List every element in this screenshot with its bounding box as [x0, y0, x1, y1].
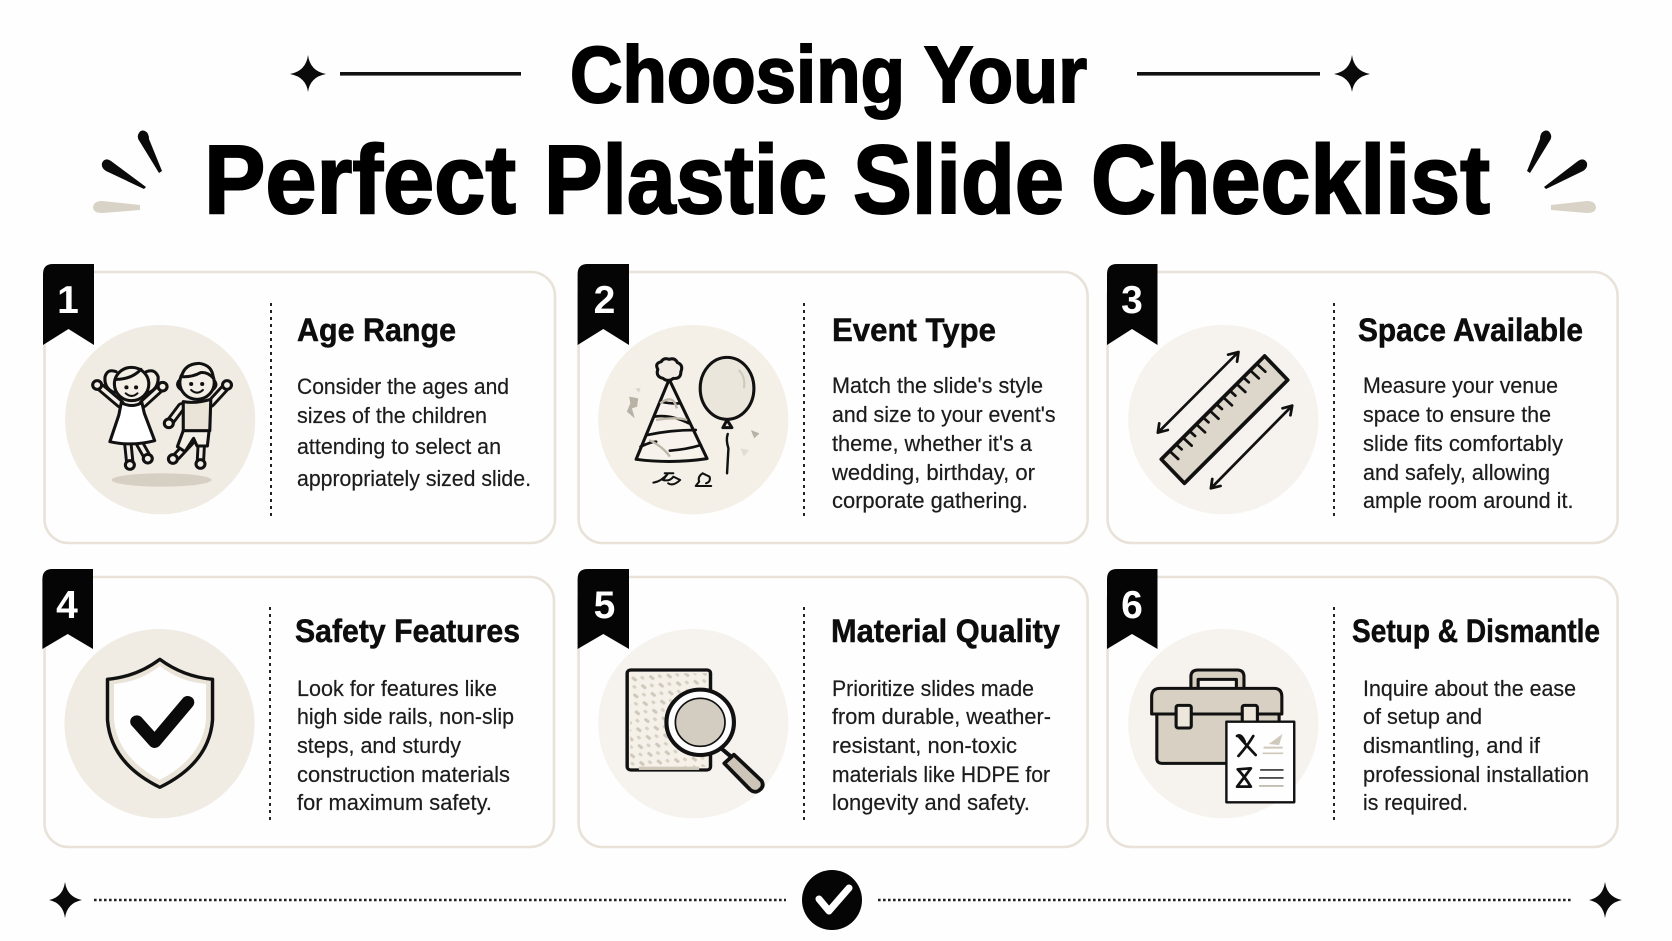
body text: Look for features like	[297, 676, 497, 701]
panel: material quality	[578, 569, 1088, 847]
footer divider	[49, 870, 1622, 930]
body text: longevity and safety.	[832, 790, 1030, 815]
panel: space available	[1107, 264, 1618, 543]
panel: safety features	[42, 569, 554, 847]
body text: construction materials	[297, 762, 510, 787]
footer star: left	[49, 882, 82, 918]
body text: Inquire about the ease	[1363, 676, 1576, 701]
ribbon number 6	[1107, 569, 1158, 649]
body text	[297, 374, 531, 491]
body text: space to ensure the	[1363, 402, 1551, 427]
body text: theme, whether it's a	[832, 431, 1032, 456]
body text: is required.	[1363, 790, 1468, 815]
ribbon number 2	[578, 264, 629, 345]
body text	[831, 373, 1056, 513]
sparks: right	[1527, 130, 1596, 213]
heading: material quality: Material Quality	[831, 613, 1060, 649]
ribbon number 5	[578, 569, 629, 649]
body text: slide fits comfortably	[1363, 431, 1564, 456]
body text: materials like HDPE for	[832, 762, 1050, 787]
body text: Match the slide's style	[832, 373, 1043, 398]
ribbon number 1: 1	[57, 279, 79, 322]
heading line 2	[204, 125, 1490, 234]
heading: safety features: Safety Features	[295, 613, 520, 649]
heading line 2: Slide	[853, 125, 1064, 234]
heading: event type: Event Type	[832, 312, 996, 348]
panel: event type	[578, 264, 1088, 543]
icon circle with party hat and balloon	[598, 325, 788, 514]
body text: for maximum safety.	[297, 790, 492, 815]
ribbon number 2: 2	[594, 279, 615, 322]
sparks: left	[93, 130, 162, 213]
ribbon number 4: 4	[56, 584, 78, 627]
icon circle with toolbox and checklist	[1128, 629, 1318, 818]
body text	[1363, 676, 1589, 815]
body text: appropriately sized slide.	[297, 466, 531, 491]
body text: and size to your event's	[832, 402, 1056, 427]
ribbon number 5: 5	[594, 584, 615, 627]
icon circle with ruler and arrows	[1128, 325, 1318, 514]
icon circle with shield	[64, 629, 255, 818]
body text: attending to select an	[297, 434, 501, 459]
body text: Prioritize slides made	[832, 676, 1034, 701]
body text: and safely, allowing	[1363, 460, 1550, 485]
body text: corporate gathering.	[832, 488, 1028, 513]
panel: setup and dismantle	[1107, 569, 1618, 847]
body text: dismantling, and if	[1363, 733, 1541, 758]
footer star: right	[1589, 882, 1622, 918]
heading: space available: Space Available	[1358, 312, 1583, 348]
body text	[297, 676, 514, 815]
check badge	[802, 870, 862, 930]
panel: age range	[43, 264, 555, 543]
heading line 2: Plastic	[544, 125, 827, 234]
body text: steps, and sturdy	[297, 733, 462, 758]
body text: Measure your venue	[1363, 373, 1558, 398]
heading: age range: Age Range	[297, 312, 456, 348]
ribbon number 1	[43, 264, 94, 345]
heading line 1: Your	[924, 30, 1087, 119]
heading line 2: Checklist	[1091, 125, 1490, 234]
body text: of setup and	[1363, 704, 1482, 729]
body text: resistant, non-toxic	[832, 733, 1017, 758]
body text: wedding, birthday, or	[831, 460, 1035, 485]
icon circle with material swatch and magnifier	[598, 629, 788, 818]
body text	[832, 676, 1051, 815]
body text: ample room around it.	[1363, 488, 1574, 513]
body text: sizes of the children	[297, 403, 487, 428]
ribbon number 4	[42, 569, 93, 649]
heading line 1: Choosing	[570, 30, 905, 119]
body text: Consider the ages and	[297, 374, 509, 399]
body text: from durable, weather-	[832, 704, 1051, 729]
body text: professional installation	[1363, 762, 1589, 787]
ornament: left star and line	[290, 55, 521, 92]
ornament: right star and line	[1137, 55, 1370, 92]
ribbon number 3: 3	[1121, 279, 1143, 322]
ribbon number 3	[1107, 264, 1158, 345]
icon circle with children	[65, 325, 255, 514]
body text	[1363, 373, 1574, 513]
heading line 2: Perfect	[204, 125, 516, 234]
body text: high side rails, non-slip	[297, 704, 514, 729]
heading: setup and dismantle: Setup & Dismantle	[1352, 613, 1600, 649]
ribbon number 6: 6	[1121, 584, 1143, 627]
title block	[93, 30, 1596, 234]
